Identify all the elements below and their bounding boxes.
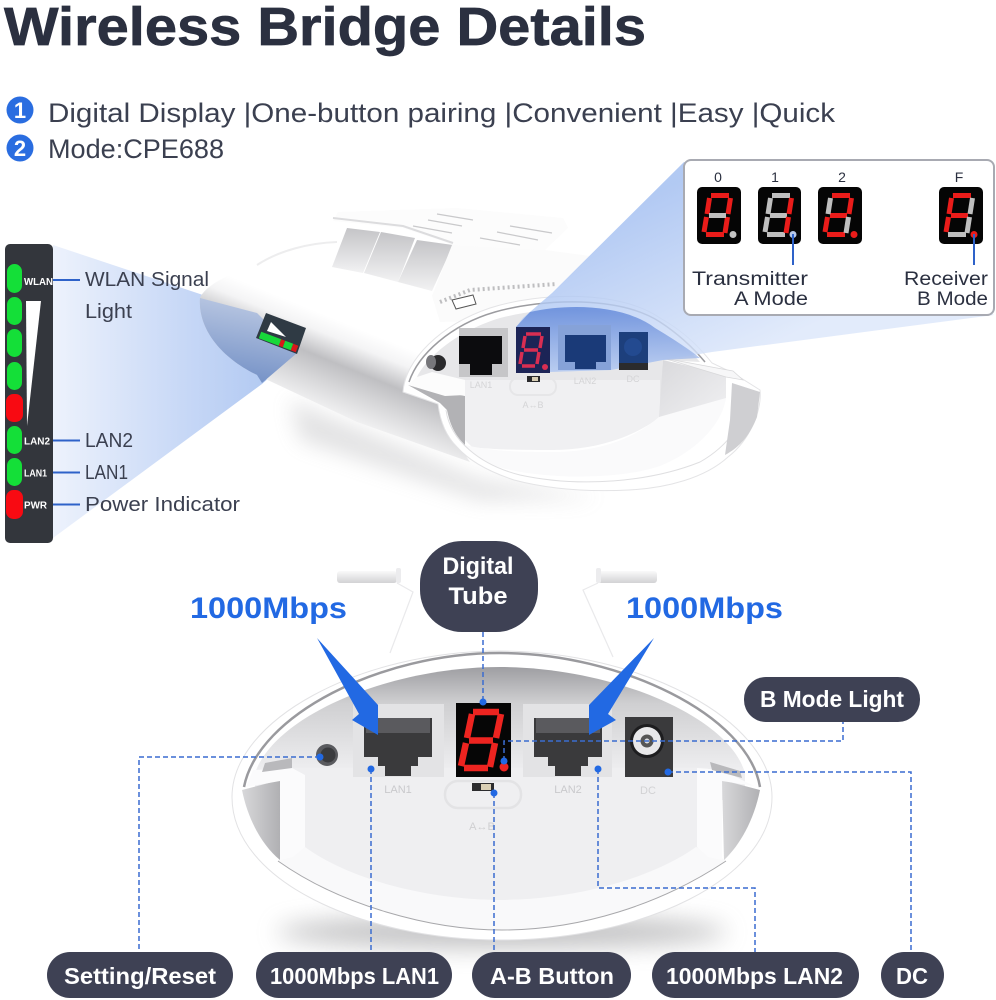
left tab [408, 372, 465, 396]
mini indicator on device [256, 313, 306, 354]
power label: Power Indicator [85, 494, 240, 516]
bullet 1 [6, 96, 34, 124]
bullet 2: 2 [14, 136, 26, 161]
DC print: DC [640, 785, 656, 797]
upper shell block [432, 245, 590, 322]
pill: B mode light: B Mode Light [760, 686, 904, 712]
port prints [470, 374, 640, 410]
bullet 1: 1 [14, 98, 26, 123]
rim inner line [409, 302, 705, 382]
digit label 1: 1 [771, 169, 779, 185]
LAN2 LED [7, 426, 22, 454]
left side wall [242, 758, 305, 860]
LAN1 label: LAN1 [85, 462, 128, 484]
pill: LAN2 [652, 952, 859, 998]
digital tube [456, 703, 511, 777]
reset button [426, 355, 446, 371]
port prints: LAN2 [574, 376, 596, 386]
bracket vents [413, 214, 552, 245]
device: angled view [200, 208, 760, 500]
mode inset panel [684, 160, 994, 315]
DC port [619, 332, 648, 370]
bullet 2 [6, 134, 34, 162]
LAN2 port [558, 325, 611, 370]
pill: DC: DC [896, 963, 928, 989]
pill: DC [881, 952, 944, 998]
pill: LAN2: 1000Mbps LAN2 [666, 963, 843, 989]
leader lines [139, 632, 911, 952]
blue arrow right [589, 638, 654, 735]
digit label 0: 0 [714, 169, 722, 185]
panel label LAN2: LAN2 [24, 436, 50, 448]
right wall [659, 360, 726, 417]
pill: A-B button [472, 952, 631, 998]
pill: digital tube: Digital [442, 553, 514, 580]
digit label 2: 2 [838, 169, 846, 185]
feature list [6, 96, 836, 164]
signal LED 4 [6, 394, 23, 422]
LAN1 LED [7, 458, 22, 486]
pill: A-B button: A-B Button [490, 963, 614, 989]
pill: digital tube: Tube [448, 583, 508, 610]
feature line 1: Digital Display |One-button pairing |Convenient |Easy |Quick [48, 98, 836, 128]
LAN1 print: LAN1 [384, 784, 412, 796]
LAN1 port [459, 328, 508, 377]
brackets behind shell [337, 568, 657, 657]
lower rim line [446, 398, 748, 482]
reset button [316, 744, 338, 766]
signal LED 3 [7, 362, 22, 390]
bracket fins [332, 228, 380, 273]
tube 2 [818, 187, 862, 244]
beam to digital display [516, 162, 994, 373]
speed label left: 1000Mbps [190, 592, 347, 625]
right wedge [725, 383, 760, 455]
leader dots [316, 698, 672, 796]
B mode label: B Mode [917, 289, 988, 310]
LAN2 print: LAN2 [554, 784, 582, 796]
rim highlight [244, 653, 760, 787]
Light label: Light [85, 301, 132, 323]
DC port [625, 717, 673, 797]
signal LED 1 [7, 297, 22, 325]
pill: B mode light [744, 677, 920, 722]
outer shell [232, 651, 772, 940]
feature line 2: Mode:CPE688 [48, 134, 224, 164]
floor line [278, 861, 726, 930]
tube F [939, 187, 983, 244]
blue arrow left [317, 638, 378, 735]
pill: LAN1 [256, 952, 452, 998]
device bracket [332, 208, 568, 296]
lower floor [278, 847, 726, 930]
port prints: A↔B [522, 400, 544, 410]
PWR LED [6, 490, 23, 519]
transmitter label: Transmitter [692, 269, 809, 290]
LAN1 port [353, 704, 444, 796]
signal wedge [26, 301, 41, 426]
A-B switch [445, 781, 521, 833]
inner back wall [292, 768, 708, 900]
pill: LAN1: 1000Mbps LAN1 [270, 963, 439, 989]
WLAN label: WLAN Signal [85, 269, 209, 291]
LAN2 port [523, 704, 612, 796]
receiver label: Receiver [904, 269, 989, 290]
inner dome [417, 309, 700, 420]
digital tube [516, 327, 550, 373]
ground shadow [277, 916, 727, 948]
mode pointers [793, 234, 974, 265]
A mode label: A Mode [734, 289, 808, 310]
signal light callouts [53, 269, 240, 516]
LAN2 label: LAN2 [85, 430, 133, 452]
device: front view [232, 568, 772, 948]
back wall [465, 380, 660, 450]
port prints: DC [626, 374, 640, 384]
bracket plate [333, 208, 568, 296]
tube 0 [697, 187, 741, 244]
panel label PWR: PWR [24, 500, 47, 512]
device body [200, 242, 470, 462]
signal light panel [5, 244, 53, 543]
left side interior [408, 385, 465, 445]
pill: setting/reset: Setting/Reset [64, 963, 216, 989]
beam inside opening [516, 307, 700, 373]
beam to signal lights [53, 245, 297, 538]
rating label print [440, 284, 557, 309]
right side wall [697, 762, 760, 860]
A-B switch [510, 376, 556, 395]
outer shell [403, 296, 760, 491]
pill: setting/reset [47, 952, 233, 998]
panel label WLAN: WLAN [24, 276, 53, 288]
right wall top tab [663, 358, 743, 380]
signal LED 2 [7, 329, 22, 357]
floor [465, 398, 726, 476]
device ports: angled view [426, 325, 648, 410]
inner dome [255, 667, 745, 800]
blue beam on body end [200, 298, 297, 383]
speed label right: 1000Mbps [626, 592, 783, 625]
pill: digital tube [420, 541, 538, 632]
body end arc [257, 242, 337, 265]
A-B print: A↔B [469, 821, 495, 833]
body floor shadow [290, 400, 600, 500]
WLAN LED [7, 264, 22, 293]
port prints: LAN1 [470, 380, 492, 390]
tube 1 [758, 187, 801, 244]
digit label F: F [955, 169, 963, 185]
panel label LAN1: LAN1 [24, 468, 47, 480]
